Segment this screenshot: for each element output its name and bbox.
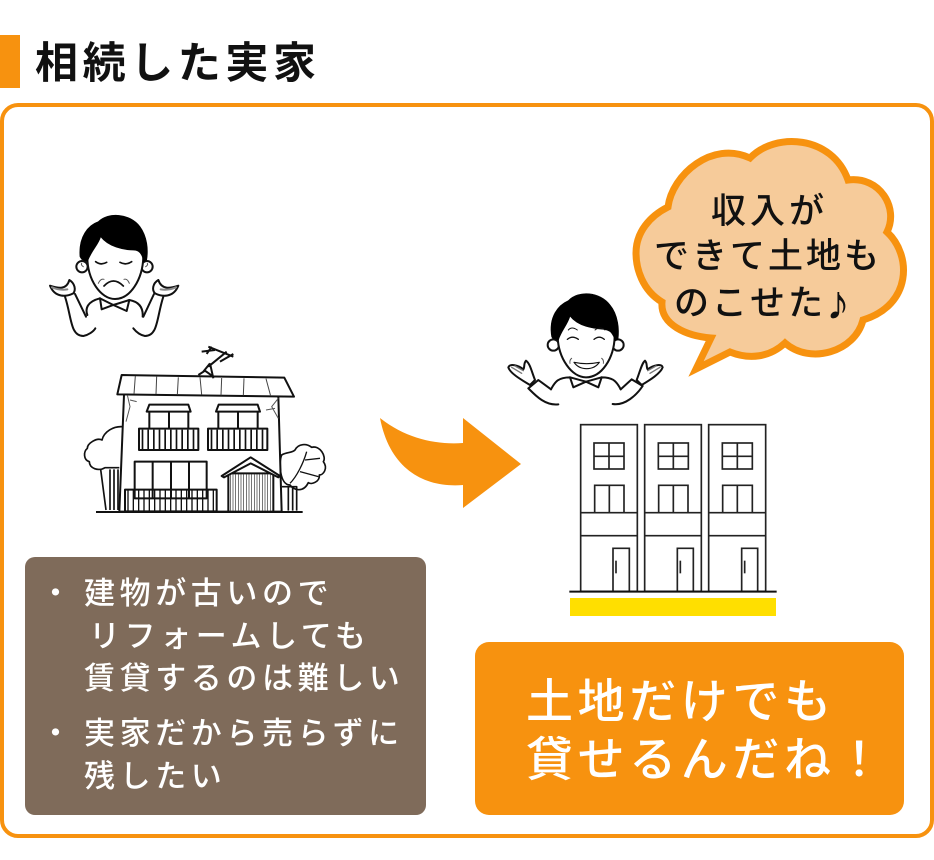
bubble text: できて土地も	[654, 237, 882, 276]
title marker	[0, 35, 20, 88]
panel: concerns	[25, 557, 426, 815]
land strip	[570, 598, 776, 616]
bubble text: ♪	[826, 277, 853, 330]
concerns text: リフォームしても	[89, 619, 370, 654]
house unit right	[709, 425, 766, 591]
concerns text: ・	[40, 716, 76, 751]
concerns text	[40, 576, 404, 794]
house unit middle	[645, 425, 701, 591]
conclusion text: 土地だけでも	[526, 675, 836, 728]
conclusion text: 貸せるんだね！	[526, 733, 887, 786]
icon: old house	[85, 347, 325, 512]
bubble text: のこせた	[674, 284, 826, 323]
arrow	[380, 418, 521, 508]
speech bubble	[636, 142, 903, 369]
concerns text: 実家だから売らずに	[84, 716, 404, 751]
conclusion text	[526, 675, 887, 786]
concerns text: 建物が古いので	[84, 576, 333, 611]
concerns text: 残したい	[84, 759, 226, 794]
concerns text: ・	[40, 576, 76, 611]
concerns text: 賃貸するのは難しい	[84, 661, 404, 696]
title: 相続した実家	[35, 40, 321, 88]
bubble text: 収入が	[711, 192, 828, 231]
icon: happy person	[508, 294, 663, 405]
house unit left	[581, 425, 637, 591]
icon: row of three narrow houses	[569, 425, 777, 592]
icon: worried person	[50, 215, 178, 336]
panel: conclusion	[475, 642, 904, 815]
bubble text	[654, 192, 882, 330]
